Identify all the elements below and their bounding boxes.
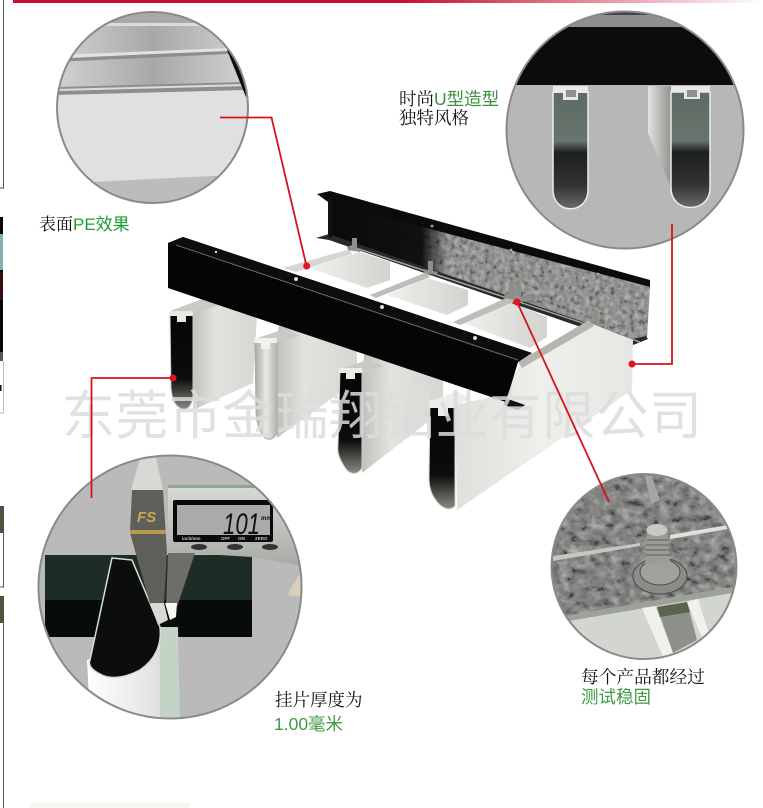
label: every product tested: 测试稳固 xyxy=(581,687,651,707)
label: blade thickness: 挂片厚度为 xyxy=(275,690,362,710)
callout circle: caliper thickness measurement: inch/mm xyxy=(182,536,201,541)
callout circle: caliper thickness measurement: ZERO xyxy=(255,536,268,541)
callout circle: caliper thickness measurement xyxy=(37,454,303,720)
callout circle: caliper thickness measurement: OFF xyxy=(221,536,230,541)
company watermark: 东莞市金瑞翔铝业有限公司 xyxy=(62,387,702,446)
callout circle: caliper thickness measurement: FS xyxy=(137,509,156,526)
rails xyxy=(283,249,514,325)
label: every product tested: 每个产品都经过 xyxy=(581,667,705,687)
front carrier beam xyxy=(168,237,532,410)
callout circle: U-shaped profile xyxy=(505,10,745,250)
rear panels between rails xyxy=(310,252,547,348)
label: blade thickness xyxy=(274,690,362,734)
top red bar xyxy=(13,0,763,3)
callout circle: caliper thickness measurement: mm xyxy=(261,516,272,522)
faint cut-off caption at bottom xyxy=(30,803,190,808)
blade 4 xyxy=(429,320,633,510)
blade 1 xyxy=(170,297,257,410)
label: fashionable U shape: 独特风格 xyxy=(399,108,469,128)
clip bolts xyxy=(347,238,604,327)
blade 3 xyxy=(338,350,443,473)
blade 2 xyxy=(254,320,357,439)
label: every product tested xyxy=(581,667,705,707)
left edge page fragments xyxy=(0,0,4,808)
red leader line: thickness xyxy=(92,374,176,498)
ceiling product assembly xyxy=(168,190,653,510)
caliper jaws xyxy=(131,458,163,490)
label: fashionable U shape xyxy=(399,89,499,128)
label: blade thickness: 1.00毫米 xyxy=(274,714,343,734)
red leader line: fixing xyxy=(514,298,609,502)
callout circle: caliper thickness measurement: 101 xyxy=(223,508,260,541)
red leader line: U profile xyxy=(628,224,672,368)
red leader line: PE surface xyxy=(220,118,310,270)
label: fashionable U shape: 时尚U型造型 xyxy=(399,89,499,109)
callout circle: caliper thickness measurement: ON xyxy=(238,536,245,541)
label: surface PE effect: 表面PE效果 xyxy=(39,215,130,234)
callout circle: bolted galvanised fixing xyxy=(550,472,738,665)
thumb xyxy=(288,574,300,597)
dark backdrop xyxy=(45,555,252,602)
blade profile xyxy=(87,627,180,719)
rear carrier beam xyxy=(316,190,653,345)
callout circle: surface PE finish xyxy=(56,11,250,205)
caliper body xyxy=(168,486,302,566)
